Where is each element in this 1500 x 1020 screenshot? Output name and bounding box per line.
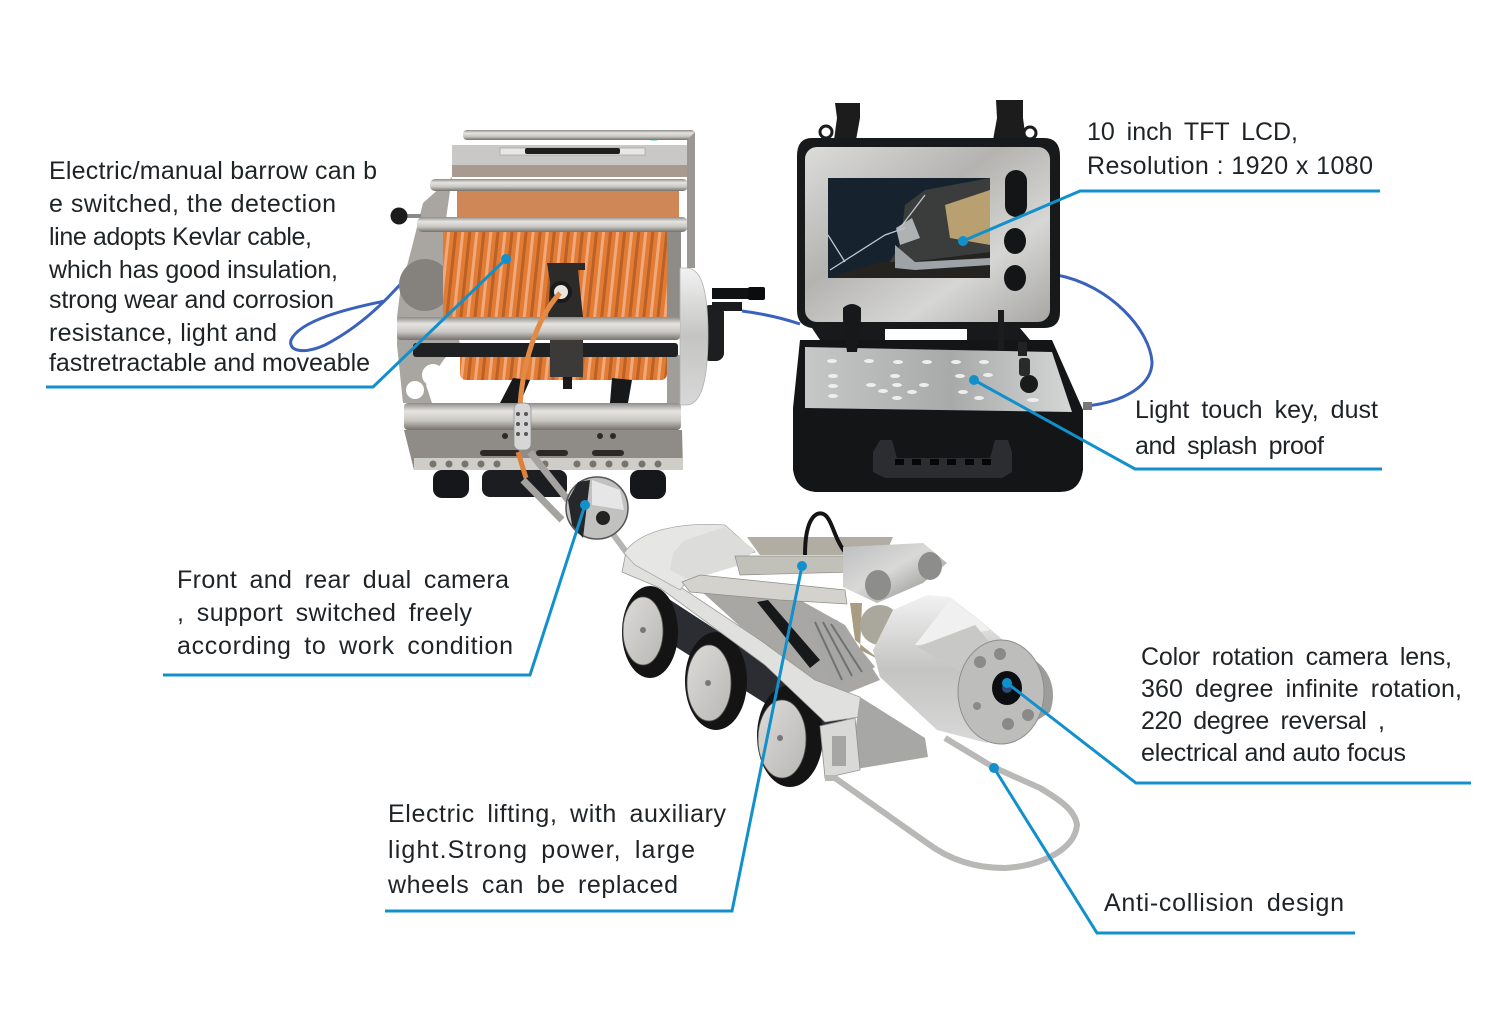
- reel drive cable: [291, 240, 443, 351]
- case right cable: [1057, 275, 1152, 406]
- lifting text: light.Strong power, large: [388, 836, 695, 864]
- reel feet: [433, 470, 469, 498]
- callout: lifting: [385, 561, 807, 911]
- aux light: [843, 543, 947, 603]
- lens text: 220 degree reversal ,: [1141, 707, 1385, 735]
- reel text: Electric/manual barrow can b: [49, 157, 377, 185]
- keys text: [1135, 396, 1378, 460]
- lens leader line: [1002, 678, 1471, 783]
- case handle: [873, 440, 1012, 478]
- dual camera text: according to work condition: [177, 632, 513, 660]
- joystick: [1018, 342, 1038, 393]
- keys text: and splash proof: [1135, 432, 1324, 460]
- keys leader line: [969, 375, 1382, 469]
- reel text: e switched, the detection: [49, 190, 336, 218]
- reel top box: [452, 145, 688, 177]
- reel leader line: [46, 254, 511, 387]
- heat sink: [807, 617, 875, 690]
- lid: [797, 138, 1060, 340]
- lifting text: wheels can be replaced: [387, 871, 678, 899]
- callout: camera lens: [1002, 643, 1471, 783]
- black actuator: [757, 600, 820, 668]
- control panel: [805, 347, 1072, 412]
- reel text: strong wear and corrosion: [49, 286, 334, 314]
- rear shell: [624, 524, 755, 590]
- camera body: [873, 595, 1050, 743]
- connector block: [514, 403, 531, 450]
- lcd screen: [828, 178, 990, 278]
- lcd text: Resolution : 1920 x 1080: [1087, 152, 1373, 180]
- reel side flange right: [667, 228, 681, 320]
- black cable: [805, 513, 845, 555]
- lifting text: [387, 800, 726, 899]
- front bracket: [820, 718, 860, 778]
- dual camera leader line: [163, 500, 590, 675]
- light bracket: [850, 603, 880, 660]
- lifting text: Electric lifting, with auxiliary: [388, 800, 726, 828]
- top plate: [747, 537, 893, 555]
- callout: reel: [46, 157, 511, 387]
- front wheel: [757, 685, 823, 787]
- dual camera text: Front and rear dual camera: [177, 566, 509, 594]
- reel left side plate: [397, 177, 460, 403]
- reel silver wheel: [680, 268, 708, 405]
- anti-collision leader line: [989, 763, 1355, 933]
- lens text: Color rotation camera lens,: [1141, 643, 1452, 671]
- crawler robot: [566, 477, 1077, 868]
- callout: anti-collision: [989, 763, 1355, 933]
- reel right black drive: [702, 305, 724, 361]
- reel text: resistance, light and: [49, 319, 277, 347]
- rear wheel: [622, 586, 678, 678]
- keys text: Light touch key, dust: [1135, 396, 1378, 424]
- anti-collision bumper: [825, 738, 1077, 868]
- cable reel: [291, 130, 800, 520]
- tether tube to robot: [610, 530, 632, 560]
- case hinges: [843, 304, 861, 352]
- orange tether: [520, 293, 560, 405]
- monitor case: [793, 100, 1152, 492]
- center deck: [700, 590, 880, 700]
- callout: keys: [969, 375, 1382, 469]
- robot side chassis: [655, 590, 860, 745]
- lens text: [1141, 643, 1462, 767]
- lid openings: [1005, 170, 1027, 217]
- case latches: [834, 103, 860, 140]
- reel text: [48, 157, 377, 377]
- lens text: 360 degree infinite rotation,: [1141, 675, 1462, 703]
- middle wheel: [685, 632, 747, 730]
- rear camera: [566, 477, 628, 539]
- chassis rail: [622, 552, 866, 722]
- dual camera text: , support switched freely: [177, 599, 472, 627]
- case connector: [1083, 402, 1092, 410]
- reel crossbars: [397, 130, 695, 430]
- reel right side rails: [687, 132, 695, 268]
- lcd leader line: [958, 191, 1380, 246]
- callout: dual camera: [163, 500, 590, 675]
- anti-collision text: Anti-collision design: [1104, 889, 1344, 917]
- lens text: electrical and auto focus: [1141, 739, 1406, 767]
- sensor leads: [518, 452, 526, 478]
- reel legs behind: [500, 378, 632, 403]
- lcd text: 10 inch TFT LCD,: [1087, 118, 1298, 146]
- lift arms: [735, 556, 853, 575]
- reel bottom tray: [404, 430, 683, 470]
- motor housing: [670, 527, 755, 580]
- reel text: which has good insulation,: [48, 256, 338, 284]
- lcd text: [1087, 118, 1373, 180]
- dual camera text: [177, 566, 513, 660]
- reel text: line adopts Kevlar cable,: [49, 223, 312, 251]
- callout: lcd: [958, 118, 1380, 246]
- reel knob: [395, 214, 421, 218]
- lower body: [850, 697, 928, 770]
- orange spool upper: [457, 190, 679, 218]
- case base: [793, 340, 1083, 492]
- lifting leader line: [385, 561, 807, 911]
- lid steel plate: [805, 147, 1050, 322]
- reel front mounts: [547, 263, 585, 317]
- orange cable spool: [443, 232, 667, 320]
- camera head: [958, 640, 1053, 744]
- corrugated tube: [413, 343, 678, 357]
- reel text: fastretractable and moveable: [49, 349, 370, 377]
- reel link cable: [742, 311, 800, 324]
